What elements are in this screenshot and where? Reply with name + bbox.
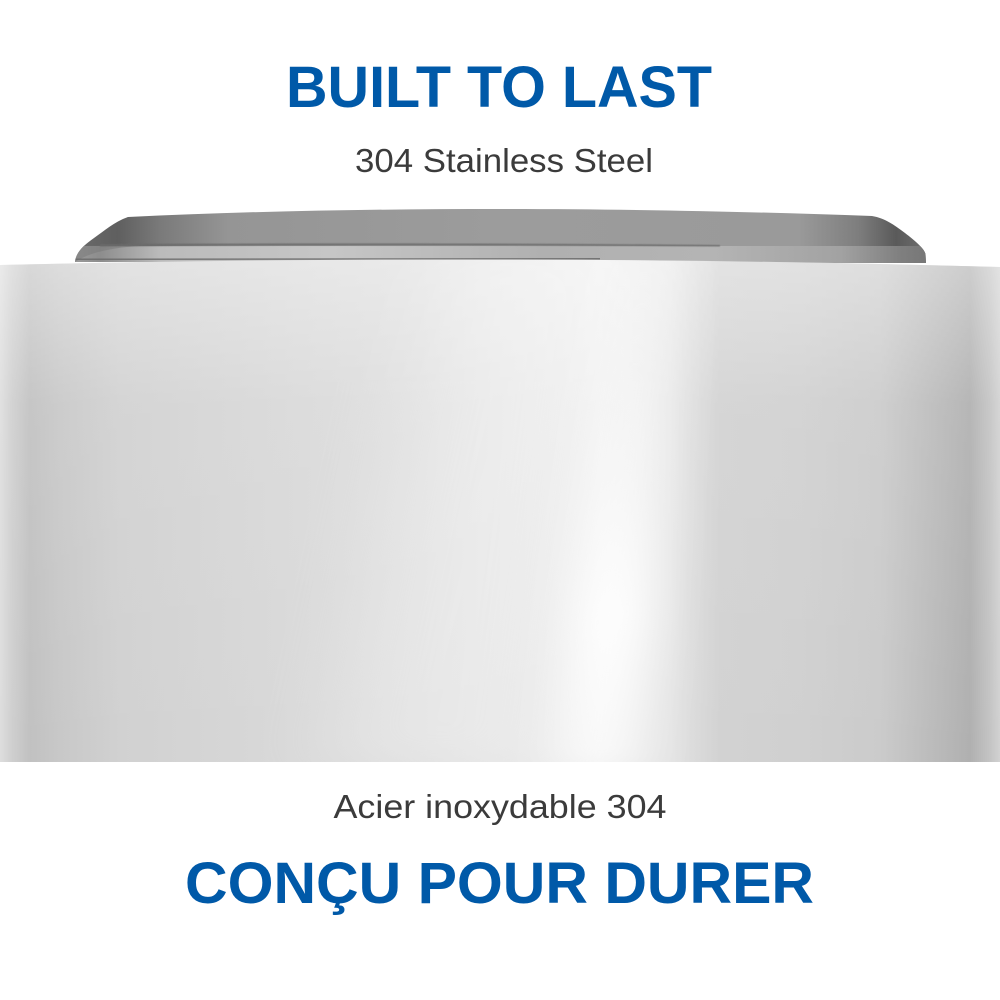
title: french heading: CONÇU POUR DURER (185, 851, 814, 916)
subtitle: french material: Acier inoxydable 304 (334, 788, 666, 825)
subtitle: english material: 304 Stainless Steel (355, 142, 653, 179)
illustration: stainless steel lid (75, 205, 926, 265)
title: english heading: BUILT TO LAST (286, 55, 712, 120)
illustration: stainless steel cylinder body (0, 250, 1000, 770)
